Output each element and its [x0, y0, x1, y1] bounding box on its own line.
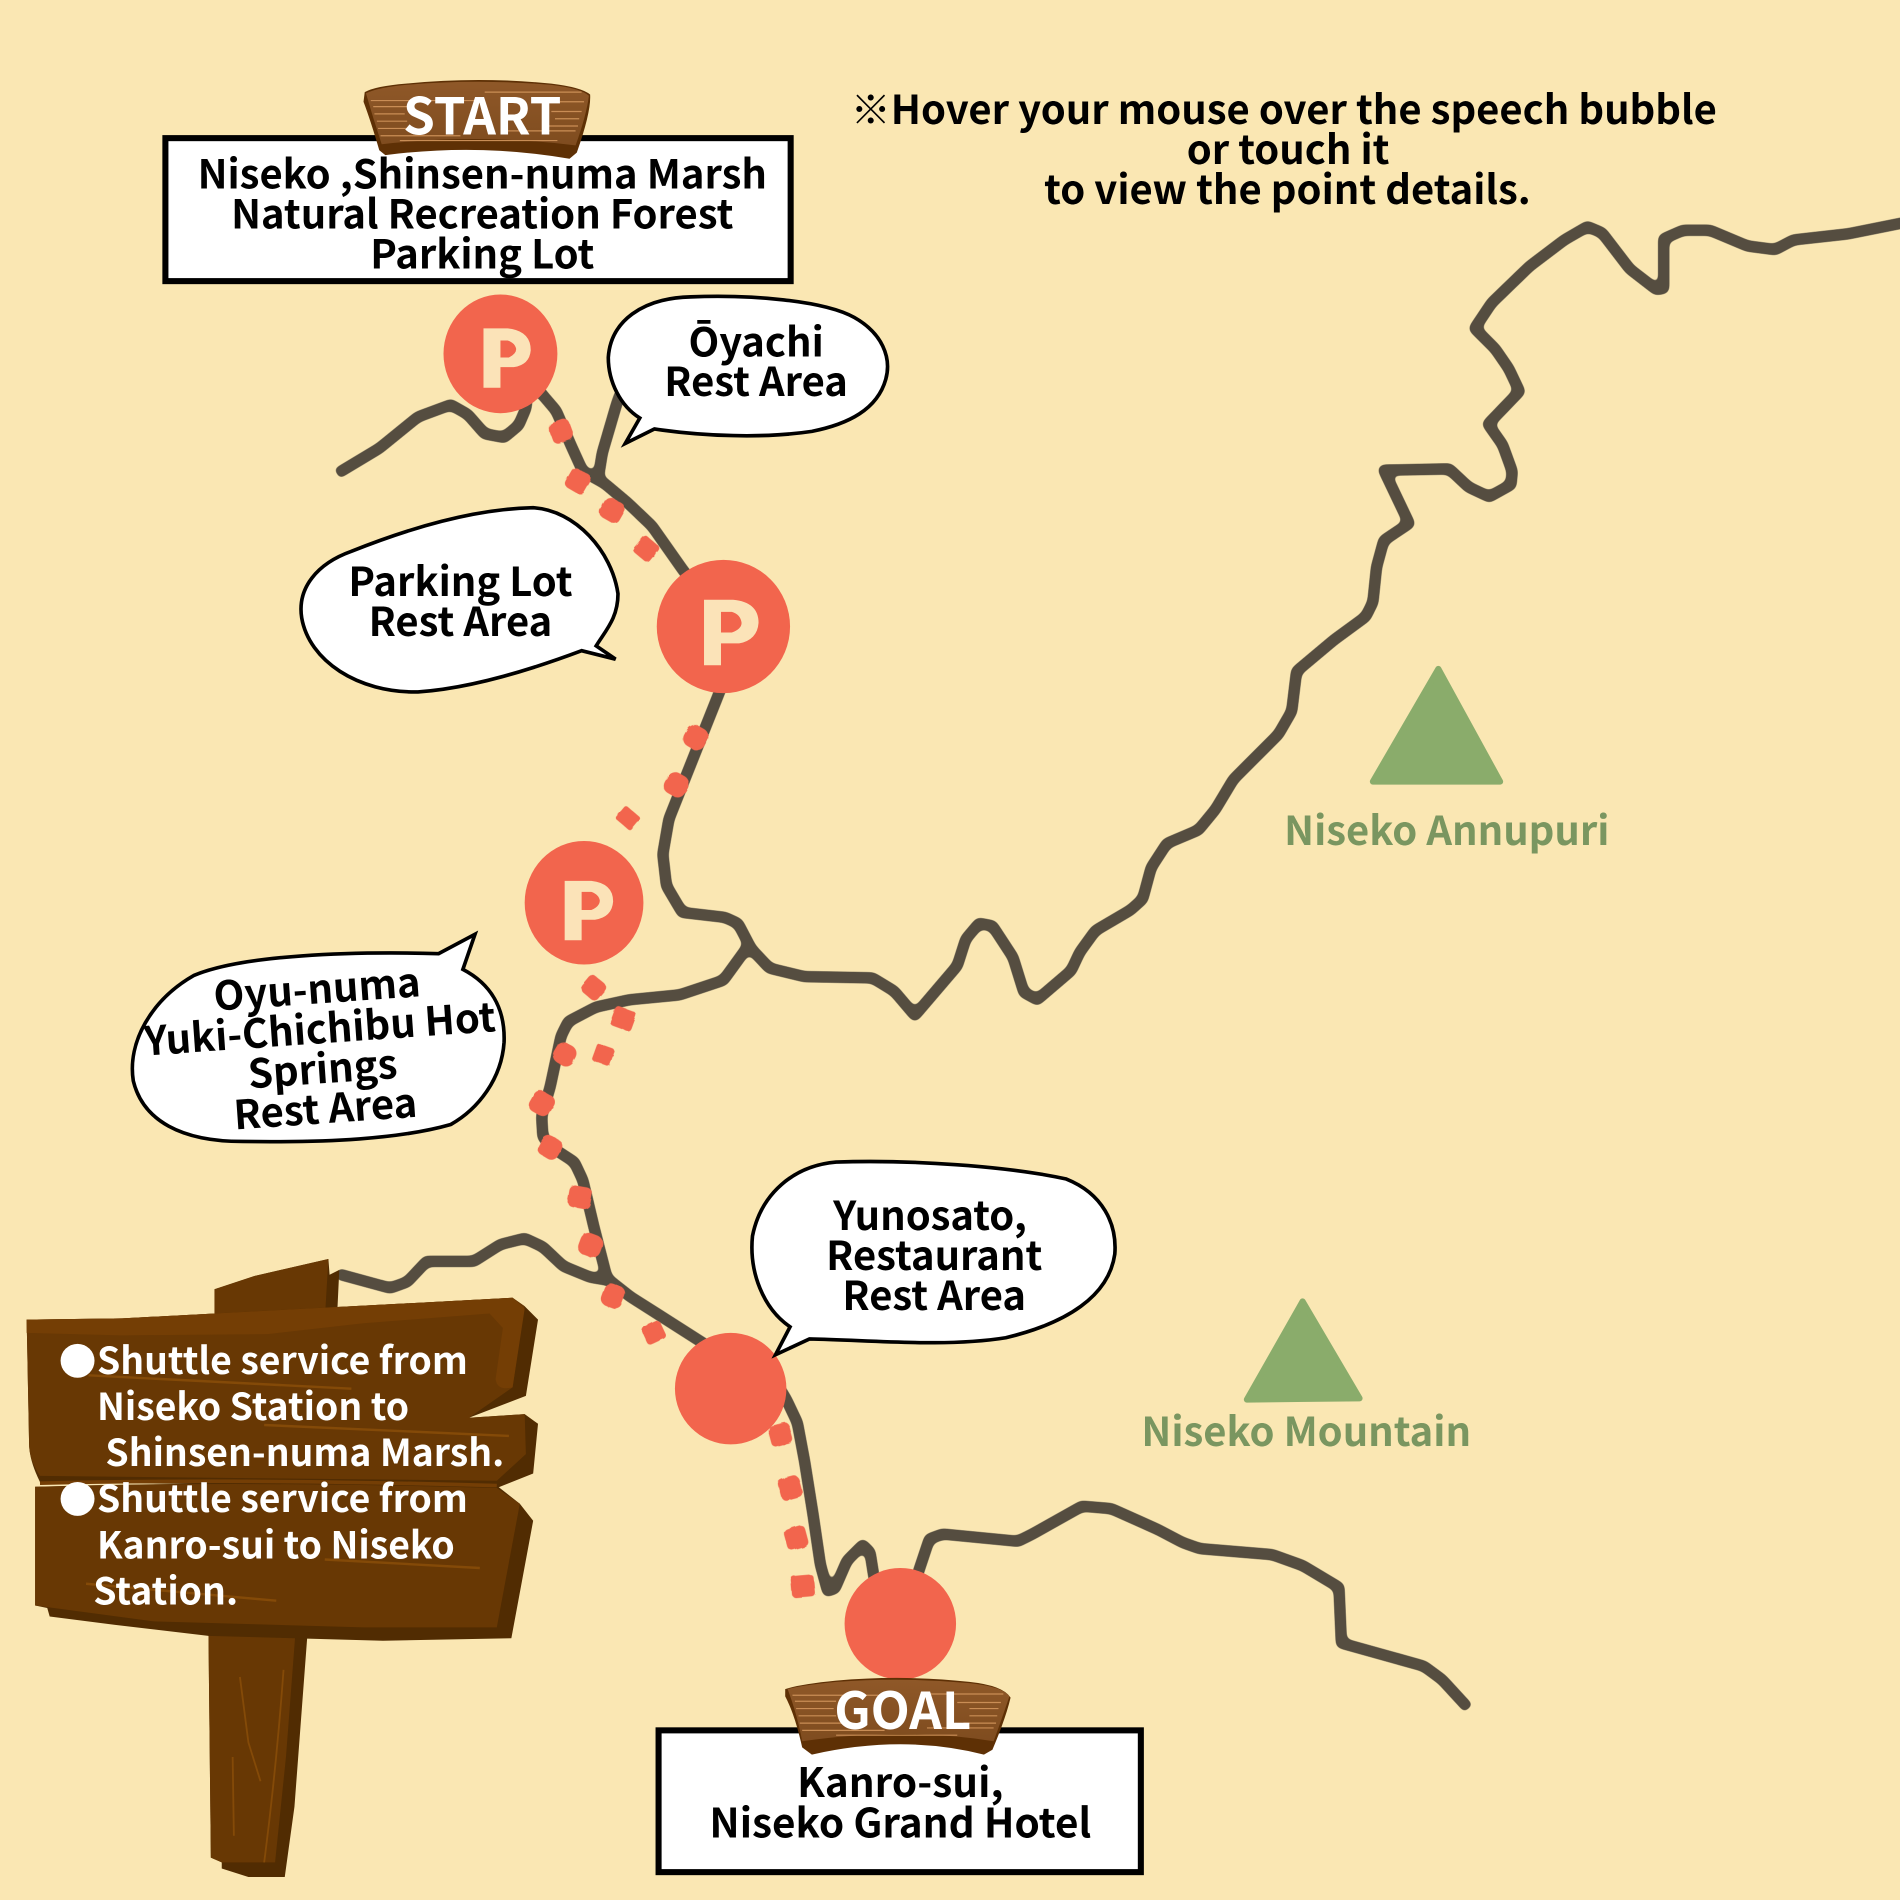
speech bubble: Oyu-numa: Springs	[246, 1032, 399, 1100]
post top	[214, 1259, 339, 1327]
instruction note: to view the point details.	[1044, 158, 1531, 216]
goal label box: Kanro-sui,	[797, 1750, 1004, 1809]
speech bubble: Parking Lot: Parking Lot	[348, 550, 573, 608]
speech bubble: Parking Lot	[301, 508, 618, 692]
shuttle bullets	[61, 1344, 95, 1516]
speech bubble: Oyachi	[608, 296, 888, 443]
speech bubble: Oyachi: Ōyachi	[689, 310, 824, 368]
marker: start parking	[443, 294, 557, 413]
speech bubble: Yunosato: Restaurant	[826, 1224, 1042, 1282]
start label box: Niseko ,Shinsen-numa Marsh	[198, 142, 767, 200]
shuttle text: Shuttle service from	[97, 1469, 468, 1523]
goal wooden sign	[785, 1670, 1011, 1755]
speech bubble: Yunosato	[752, 1162, 1115, 1355]
instruction note: or touch it	[1187, 118, 1390, 176]
shuttle text: Shinsen-numa Marsh.	[105, 1423, 504, 1477]
speech bubble: Yunosato: Rest Area	[842, 1264, 1026, 1322]
shuttle text: Kanro-sui to Niseko	[97, 1515, 455, 1569]
speech bubble: Oyachi: Rest Area	[664, 350, 848, 408]
shuttle text: Station.	[93, 1561, 238, 1615]
shuttle text: Shuttle service from	[97, 1331, 468, 1385]
marker: oyu-numa parking	[525, 841, 643, 965]
start wooden sign	[364, 76, 590, 159]
start wooden sign: START	[403, 76, 561, 150]
marker: yunosato	[675, 1333, 786, 1444]
start label box: Natural Recreation Forest	[231, 182, 734, 240]
instruction note	[851, 78, 1717, 216]
post bottom	[208, 1630, 308, 1877]
dotted walking route	[526, 417, 815, 1598]
speech bubble: Oyu-numa: Oyu-numa	[211, 950, 422, 1023]
mountain: Niseko Mountain	[1141, 1301, 1471, 1458]
speech bubble: Parking Lot: Rest Area	[369, 590, 552, 648]
shuttle text: Niseko Station to	[97, 1377, 409, 1431]
wooden signpost	[27, 1259, 538, 1877]
goal label box: Niseko Grand Hotel	[709, 1791, 1091, 1850]
goal label box	[659, 1730, 1141, 1872]
start label box: Parking Lot	[370, 222, 595, 280]
board lower	[35, 1481, 533, 1641]
speech bubble: Oyu-numa: Yuki-Chichibu Hot	[141, 985, 497, 1068]
marker: parking lot	[657, 560, 790, 693]
speech bubble: Oyu-numa	[132, 934, 504, 1147]
board upper	[27, 1298, 538, 1488]
mountain: Niseko Mountain: Niseko Mountain	[1141, 1400, 1471, 1458]
speech bubble: Yunosato: Yunosato,	[832, 1184, 1027, 1242]
mountain: Niseko Annupuri	[1284, 669, 1609, 857]
start label box	[165, 138, 791, 281]
shuttle text	[93, 1331, 504, 1615]
marker: goal	[845, 1568, 956, 1679]
road network	[337, 222, 1900, 1709]
instruction note: ※Hover your mouse over the speech bubble	[851, 78, 1717, 136]
speech bubble: Oyu-numa: Rest Area	[232, 1071, 419, 1141]
goal wooden sign: GOAL	[834, 1670, 971, 1744]
mountain: Niseko Annupuri: Niseko Annupuri	[1284, 799, 1609, 857]
